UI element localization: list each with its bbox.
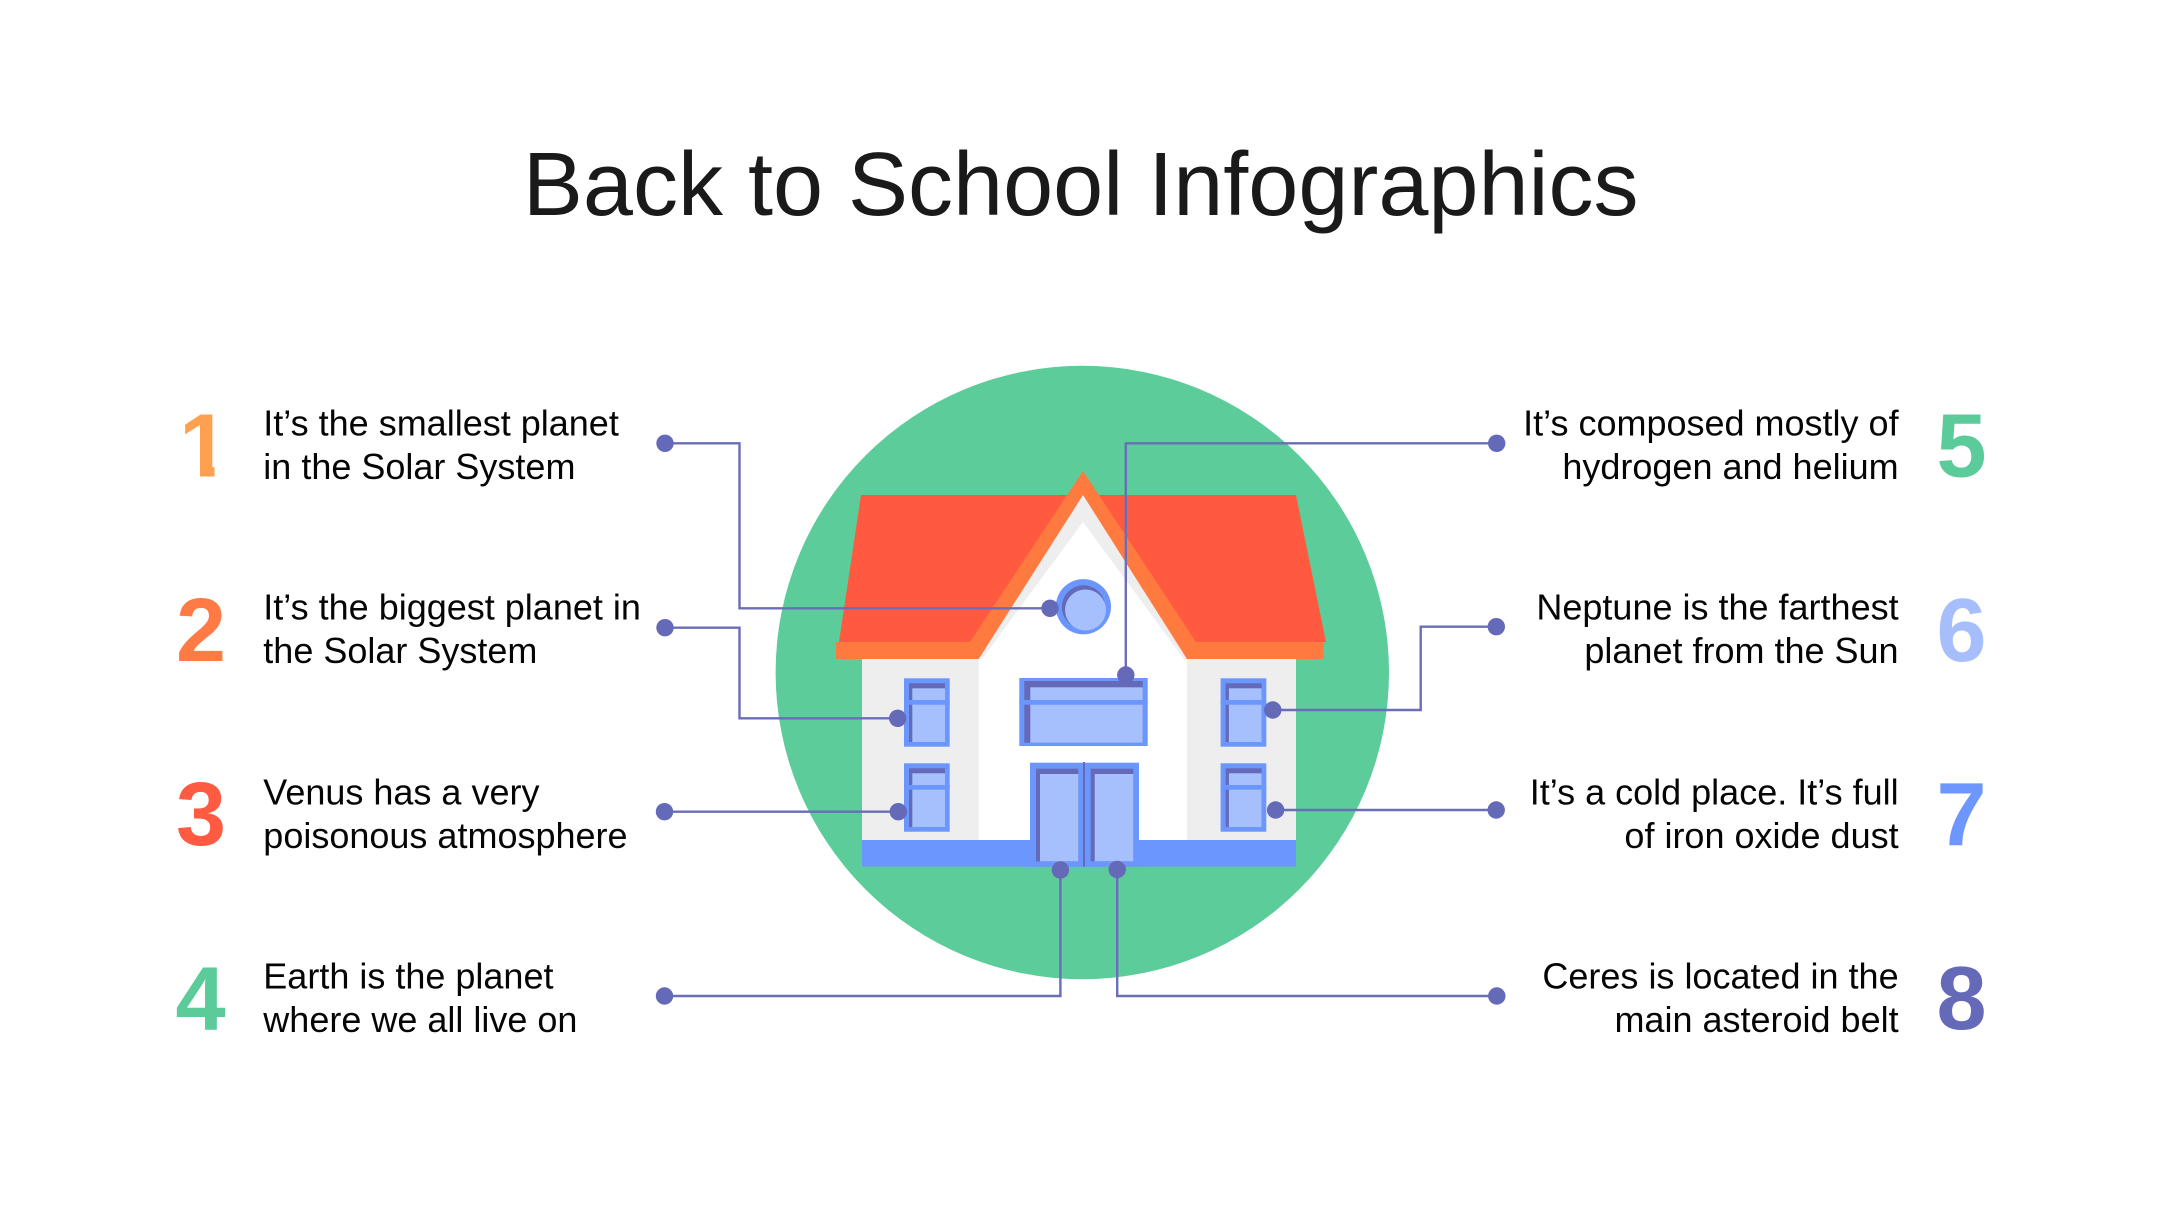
connector 1 <box>656 435 1059 617</box>
item 2: number and text: It’s the biggest planet in <box>263 586 641 628</box>
title: Back to School Infographics <box>523 135 1639 235</box>
item 8: number and text: Ceres is located in the <box>1542 956 1899 996</box>
item 1: number and text: 1 <box>179 396 229 496</box>
blue foundation <box>862 840 1296 867</box>
item 8: number and text <box>1542 949 1987 1049</box>
left upper window <box>904 678 950 747</box>
item 2: number and text: the Solar System <box>263 630 537 671</box>
roof eave <box>836 642 1324 659</box>
left lower window <box>904 763 950 832</box>
gable white wall <box>979 522 1187 841</box>
connector 5 <box>1117 435 1505 684</box>
connector 3 <box>656 803 907 820</box>
connector 2 <box>656 619 906 727</box>
connector 4 <box>656 861 1069 1005</box>
right upper window <box>1221 678 1266 747</box>
item 6: number and text <box>1536 581 1987 681</box>
item 6: number and text: 6 <box>1936 581 1987 681</box>
item 4: number and text: Earth is the planet <box>263 956 553 996</box>
item 3: number and text: 3 <box>176 765 226 865</box>
item 7: number and text: 7 <box>1936 766 1987 866</box>
centre wide window <box>1019 678 1148 746</box>
item 7: number and text: of iron oxide dust <box>1624 815 1899 856</box>
item 5: number and text: hydrogen and helium <box>1562 446 1899 487</box>
right lower window <box>1221 763 1266 832</box>
item 8: number and text: 8 <box>1936 949 1987 1049</box>
gable orange trim <box>970 471 1196 659</box>
green circle background <box>776 366 1389 979</box>
item 3: number and text: poisonous atmosphere <box>263 815 628 856</box>
item 5: number and text: It’s composed mostly of <box>1523 402 1900 444</box>
item 8: number and text: main asteroid belt <box>1614 999 1899 1040</box>
gable wall shade <box>979 495 1187 841</box>
item 4: number and text <box>175 949 577 1049</box>
connector 6 <box>1264 618 1505 719</box>
item 6: number and text: planet from the Sun <box>1584 630 1899 671</box>
illustration: school building on green circle <box>776 366 1389 979</box>
connector 8 <box>1108 861 1506 1005</box>
item 7: number and text <box>1530 766 1987 866</box>
item 1: number and text: in the Solar System <box>263 446 575 487</box>
item 3: number and text: Venus has a very <box>263 772 539 812</box>
red roof <box>839 495 1326 642</box>
item 2: number and text: 2 <box>176 581 226 681</box>
double door <box>1030 762 1139 867</box>
item 1: number and text <box>185 410 619 486</box>
item 6: number and text: Neptune is the farthest <box>1536 586 1899 628</box>
round attic window <box>1056 579 1111 634</box>
item 2: number and text <box>176 581 641 681</box>
item 3: number and text <box>176 765 628 865</box>
item 5: number and text <box>1523 396 1987 496</box>
item 1: number and text: It’s the smallest planet <box>263 402 619 444</box>
item 5: number and text: 5 <box>1936 396 1987 496</box>
side walls <box>862 655 1296 841</box>
item 4: number and text: 4 <box>175 949 226 1049</box>
connector 7 <box>1267 801 1505 819</box>
item 4: number and text: where we all live on <box>262 999 577 1040</box>
item 7: number and text: It’s a cold place. It’s full <box>1530 772 1899 812</box>
